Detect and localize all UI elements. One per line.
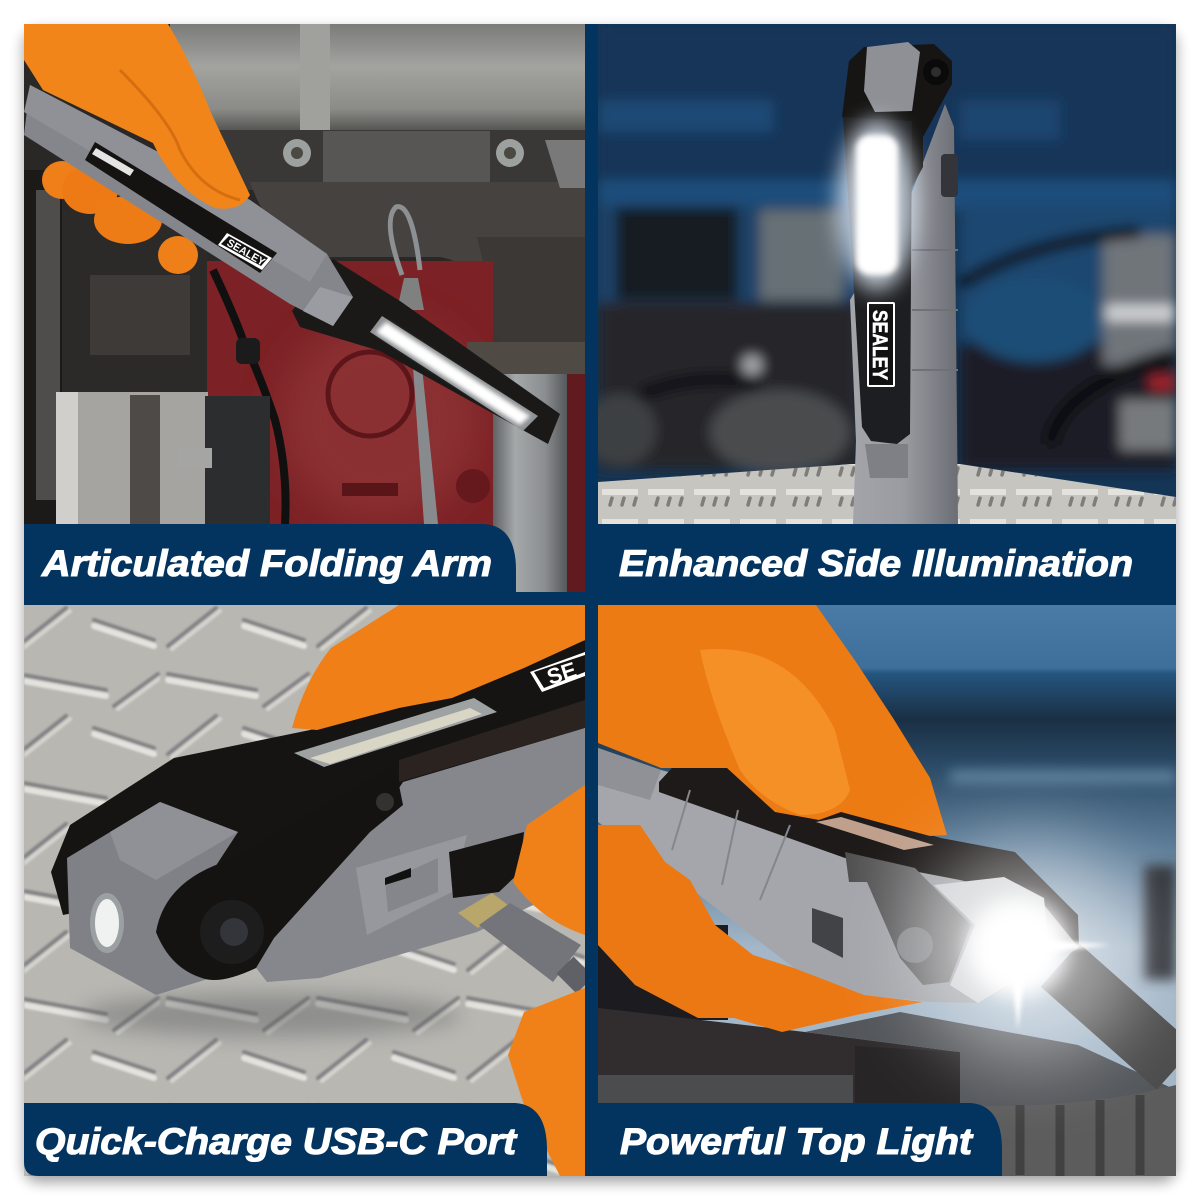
panel: powerful top light: [598, 605, 1176, 1177]
engine manifold: [170, 24, 585, 348]
orange gloves, lower right: [508, 785, 585, 1176]
caption: powerful top light: [598, 1103, 1002, 1176]
blurred workshop background: [598, 93, 1176, 476]
caption: enhanced side illumination: [598, 524, 1176, 605]
red engine block: [207, 261, 585, 592]
SEALEY badge on body: SE: [544, 657, 579, 690]
work light: [598, 748, 1079, 1003]
upright work light: [842, 42, 958, 524]
caption: quick-charge USB-C port: Quick-Charge USB-C Port: [35, 1121, 518, 1162]
caption: powerful top light: Powerful Top Light: [620, 1121, 974, 1162]
side light glow: [837, 119, 917, 291]
top light glow: [920, 840, 1140, 1060]
battery below: [598, 925, 1176, 1177]
lower gloved fingers: [42, 161, 198, 274]
upright work light: SEALEY: [868, 310, 891, 380]
work light body: [51, 640, 585, 995]
SEALEY badge on body: [530, 652, 585, 692]
caption: articulated folding arm: Articulated Folding Arm: [41, 543, 492, 584]
blurred machine background: [950, 770, 1176, 980]
work light, angled: [24, 85, 560, 444]
panel: enhanced side illumination: [584, 24, 1176, 524]
steel pipe, rod and pull loop: [390, 207, 585, 592]
alternator: [56, 392, 270, 524]
work light, angled: SEALEY: [224, 237, 267, 269]
dark engine left side: [24, 170, 286, 524]
orange glove, top: [292, 605, 585, 730]
tread plate: [598, 464, 1176, 524]
panel: quick-charge USB-C port: [24, 605, 585, 1176]
orange glove, upper hand: [24, 24, 250, 209]
caption: enhanced side illumination: Enhanced Side Illumination: [619, 543, 1133, 584]
panel: articulated folding arm: [24, 24, 585, 592]
caption: quick-charge USB-C port: [24, 1103, 547, 1176]
orange gloves: [598, 605, 947, 1032]
caption: articulated folding arm: [24, 524, 585, 605]
corrugated hose: [1060, 965, 1176, 1068]
